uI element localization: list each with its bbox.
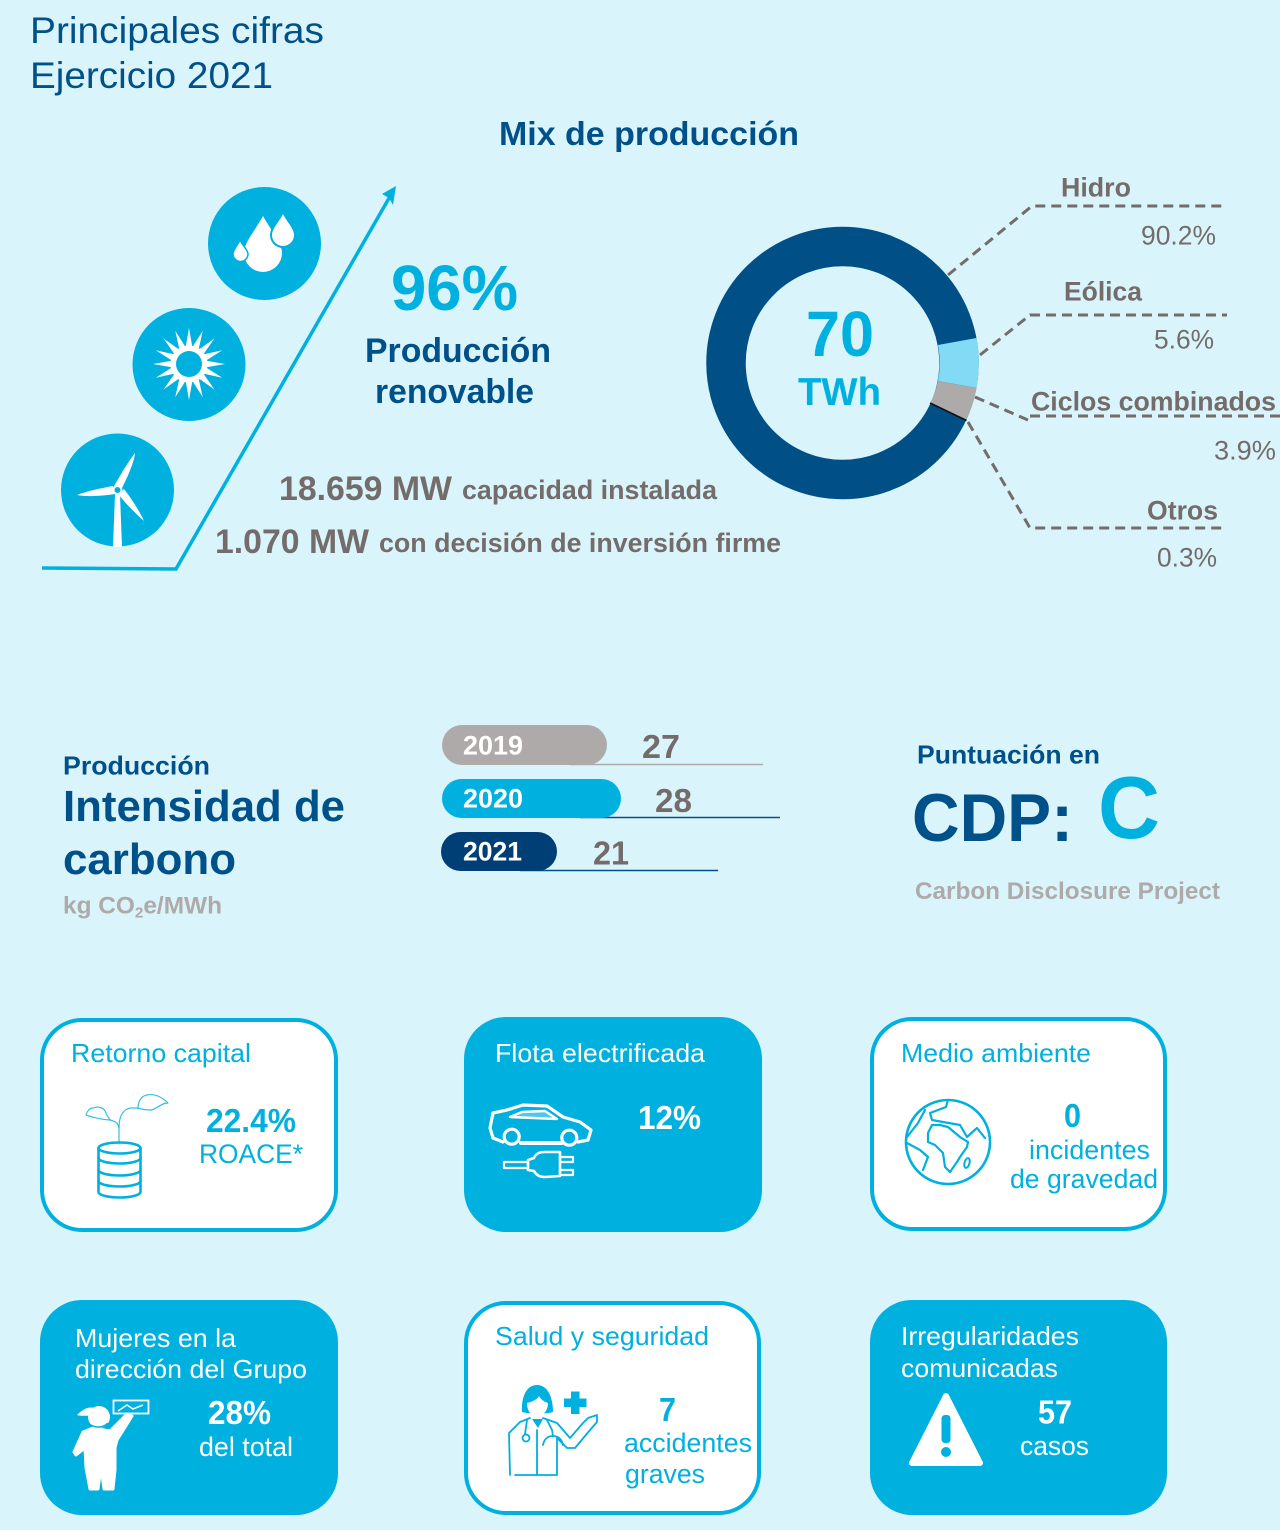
panel: salud y seguridad: Salud y seguridad (495, 1321, 709, 1351)
panel: irregularidades comunicadas: 57 (1038, 1394, 1072, 1430)
panel: salud y seguridad (466, 1303, 759, 1513)
panel: salud y seguridad: graves (625, 1459, 705, 1489)
title: Principales cifras (30, 10, 324, 51)
panel: retorno capital: 22.4% (206, 1102, 296, 1139)
heading: carbon intensity (63, 750, 345, 922)
icon: sun (132, 308, 246, 421)
panel: medio ambiente: Medio ambiente (901, 1038, 1091, 1068)
arrow: rising renewable line (42, 186, 396, 569)
panel: flota electrificada: 12% (638, 1099, 701, 1136)
icon: car with plug (490, 1105, 591, 1177)
donut centre value: TWh (798, 371, 881, 414)
callout: Ciclos combinados: 3.9% (1214, 436, 1276, 466)
panel: retorno capital: Retorno capital (71, 1038, 251, 1068)
chart: production mix donut (726, 246, 979, 480)
icon: woman at chart (74, 1400, 148, 1489)
panel: medio ambiente (872, 1019, 1165, 1229)
text block: installed capacity (215, 470, 781, 561)
panel: mujeres en la dirección (40, 1300, 338, 1515)
stat: 96% renewable production: 96% (391, 252, 518, 324)
icon: water drops (208, 187, 321, 300)
panel: irregularidades comunicadas: comunicadas (901, 1353, 1058, 1383)
stat: 96% renewable production: renovable (375, 373, 534, 411)
panel: irregularidades comunicadas: Irregularidades (901, 1321, 1079, 1351)
icon: wind turbine (61, 434, 174, 547)
bar: 2020 (442, 779, 780, 819)
panel: irregularidades comunicadas (870, 1300, 1167, 1515)
text block: installed capacity: 18.659 MW (279, 470, 453, 508)
stat: 96% renewable production (365, 252, 551, 411)
text block: installed capacity: 1.070 MW (215, 523, 370, 561)
callout: Otros (968, 422, 1227, 572)
icon: coins with sprout (86, 1095, 168, 1198)
bar: 2020: 2020 (463, 784, 523, 814)
icon: doctor (509, 1385, 597, 1475)
callout: Hidro: 90.2% (1141, 220, 1216, 250)
text block: installed capacity: capacidad instalada (462, 475, 718, 505)
bar: 2021: 21 (593, 834, 629, 872)
bar: 2019: 27 (642, 728, 680, 765)
title (30, 10, 324, 96)
panel: mujeres en la dirección: 28% (208, 1394, 271, 1431)
heading: carbon intensity: e/MWh (143, 892, 222, 920)
bar: 2021 (441, 832, 718, 872)
panel: irregularidades comunicadas: casos (1020, 1431, 1089, 1461)
panel: flota electrificada: Flota electrificada (495, 1038, 706, 1068)
callout: Eólica (980, 276, 1227, 355)
title: Ejercicio 2021 (30, 55, 273, 96)
bar: 2019: 2019 (463, 730, 523, 760)
heading: carbon intensity: kg CO (63, 892, 134, 920)
panel: mujeres en la dirección: Mujeres en la (75, 1323, 237, 1353)
heading: carbon intensity: Intensidad de (63, 782, 345, 831)
callout: Otros: 0.3% (1157, 542, 1217, 572)
stat: CDP score: Puntuación en (917, 740, 1100, 770)
callout: Hidro (948, 172, 1226, 275)
text block: installed capacity: con decisión de inversión firme (379, 528, 781, 558)
bar: 2019 (442, 725, 763, 765)
panel: medio ambiente: incidentes (1029, 1135, 1150, 1165)
callout: Eólica: 5.6% (1154, 324, 1214, 354)
stat: CDP score: C (1098, 758, 1160, 857)
heading: mix de producción: Mix de producción (499, 115, 799, 152)
stat: CDP score (912, 740, 1220, 905)
icon: warning triangle (912, 1396, 980, 1463)
callout: Eólica: Eólica (1064, 276, 1143, 306)
icon: globe (906, 1100, 990, 1184)
panel: mujeres en la dirección: dirección del Grupo (75, 1354, 307, 1384)
panel: retorno capital: ROACE* (199, 1139, 303, 1169)
bar chart: carbon intensity by year (441, 725, 780, 872)
donut centre value (798, 298, 881, 414)
stat: 96% renewable production: Producción (365, 332, 551, 370)
panel: medio ambiente: de gravedad (1010, 1164, 1158, 1194)
donut centre value: 70 (806, 298, 874, 370)
heading: carbon intensity: Producción (63, 750, 210, 780)
panel: medio ambiente: 0 (1064, 1097, 1081, 1134)
heading: carbon intensity: carbono (63, 835, 236, 884)
panel: retorno capital (42, 1020, 336, 1230)
panel: mujeres en la dirección: del total (199, 1432, 293, 1462)
stat: CDP score: Carbon Disclosure Project (915, 878, 1220, 905)
callout: Ciclos combinados: Ciclos combinados (1031, 386, 1276, 416)
panel: salud y seguridad: 7 (659, 1391, 676, 1428)
bar: 2020: 28 (655, 782, 692, 819)
bar: 2021: 2021 (463, 836, 522, 866)
heading: carbon intensity: 2 (135, 904, 143, 922)
callout: Hidro: Hidro (1061, 172, 1131, 202)
panel: salud y seguridad: accidentes (624, 1428, 752, 1458)
callout: Ciclos combinados (975, 386, 1280, 466)
panel: flota electrificada (464, 1017, 762, 1232)
stat: CDP score: CDP: (912, 780, 1073, 856)
callout: Otros: Otros (1147, 496, 1218, 526)
